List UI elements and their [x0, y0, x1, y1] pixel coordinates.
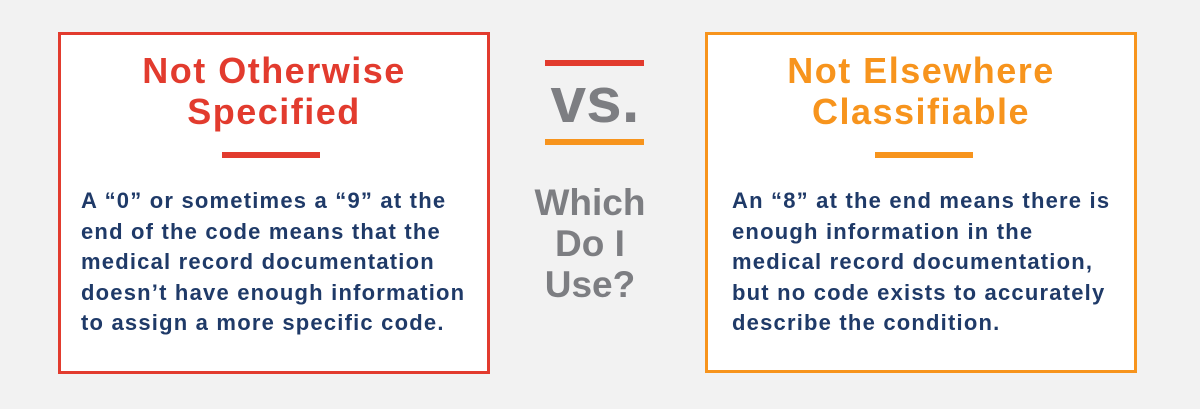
panel: not otherwise specified: [58, 32, 490, 374]
text: NOS description: doesn’t have enough information: [81, 280, 465, 304]
heading: not elsewhere classifiable: Classifiable: [812, 91, 1030, 132]
question: which do I use: Use?: [545, 264, 635, 305]
orange line: [545, 139, 644, 145]
vs text: vs.: [551, 64, 639, 136]
text: NEC description: [732, 188, 1110, 335]
text: NEC description: An “8” at the end means there is: [732, 188, 1110, 213]
text: NOS description: to assign a more specific code.: [81, 310, 445, 335]
red underline: [222, 152, 320, 158]
heading: not elsewhere classifiable: Not Elsewhere: [787, 50, 1055, 91]
text: NEC description: but no code exists to accurately: [732, 280, 1105, 304]
heading: not elsewhere classifiable: [787, 50, 1055, 132]
heading: not otherwise specified: Not Otherwise: [142, 50, 406, 91]
text: NOS description: end of the code means that the: [81, 218, 441, 244]
text: NEC description: describe the condition.: [732, 310, 1000, 335]
question: which do I use: Which: [534, 182, 645, 223]
question: which do I use: Do I: [555, 223, 625, 264]
text: NOS description: A “0” or sometimes a “9” at the: [81, 188, 446, 213]
red line top: [545, 60, 644, 66]
question: which do I use: [534, 182, 645, 305]
heading: not otherwise specified: [142, 50, 406, 132]
text: NEC description: enough information in the: [732, 218, 1033, 244]
heading: not otherwise specified: Specified: [187, 91, 361, 132]
text: NOS description: medical record documentation: [81, 249, 435, 274]
panel: not elsewhere classifiable: [705, 32, 1137, 373]
text: NOS description: [81, 188, 465, 335]
text: NEC description: medical record documentation,: [732, 249, 1093, 274]
orange underline: [875, 152, 973, 158]
